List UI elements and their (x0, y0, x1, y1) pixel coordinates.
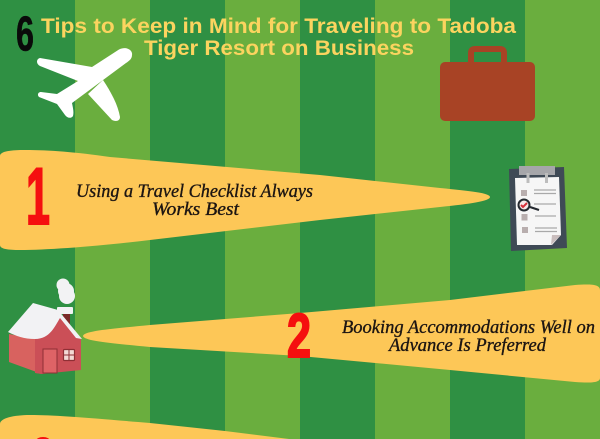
title: 6 (16, 8, 34, 62)
ribbon: tip 1 (0, 150, 490, 250)
icon: airplane (37, 48, 132, 121)
title (16, 8, 516, 62)
tip 1 text: Works Best (152, 199, 240, 220)
title: Tips to Keep in Mind for Traveling to Tadoba (41, 15, 516, 38)
tip 2 text: Advance Is Preferred (387, 335, 546, 356)
tip 2 text (342, 317, 595, 356)
icon: briefcase (440, 49, 535, 121)
ribbon: tip 3 (0, 415, 305, 439)
tip 1 text (76, 181, 313, 220)
icon: house with smoking chimney (8, 278, 82, 374)
title: Tiger Resort on Business (144, 37, 414, 60)
tip 2 text: Booking Accommodations Well on (342, 317, 595, 338)
tip 1 text: Using a Travel Checklist Always (76, 181, 313, 202)
ribbon: tip 2 (83, 285, 600, 383)
number 3 (36, 437, 50, 439)
number 1: 1 (26, 152, 50, 242)
number 2: 2 (287, 302, 311, 371)
icon: clipboard checklist (509, 166, 567, 251)
